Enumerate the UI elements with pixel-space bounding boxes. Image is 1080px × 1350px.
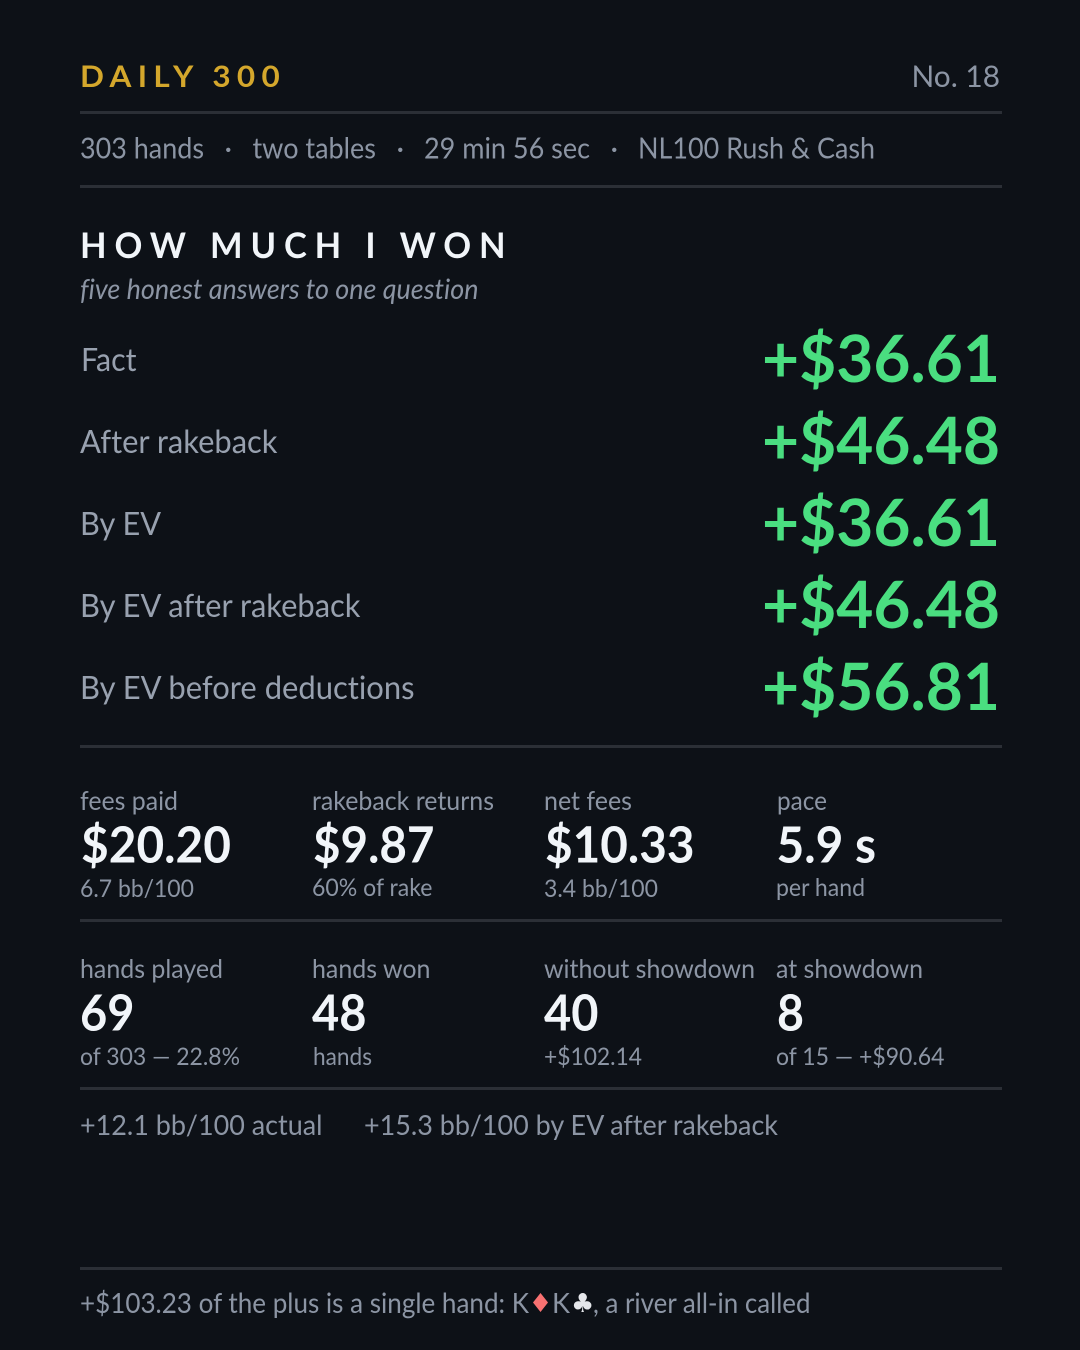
stat: hands won: 48 (312, 982, 366, 1042)
header: issue number: No. 18 (912, 58, 1000, 94)
stat: fees paid: 6.7 bb/100 (80, 874, 194, 903)
session summary: two tables (252, 130, 376, 166)
stat: at showdown (776, 952, 945, 1071)
row: by EV: By EV (80, 503, 161, 542)
stat: fees paid (80, 784, 231, 903)
stat: hands played (80, 952, 240, 1071)
stat: pace: 5.9 s (776, 814, 876, 874)
row: by EV after rakeback: +$46.48 (762, 564, 1000, 642)
row: by EV (80, 482, 1000, 560)
stat: hands won (312, 952, 430, 1071)
win rate line (80, 1107, 779, 1141)
icon: diamond (533, 1293, 548, 1312)
stat: at showdown: at showdown (776, 952, 923, 984)
stat: net fees: net fees (544, 784, 632, 816)
footer note: K (552, 1285, 570, 1319)
stat: hands won: hands won (312, 952, 430, 984)
row: after rakeback: After rakeback (80, 421, 278, 460)
win rate line: +12.1 bb/100 actual (80, 1107, 322, 1141)
stat: pace: pace (777, 784, 827, 816)
row: by EV before deductions (80, 646, 1000, 724)
stat: hands played: of 303 — 22.8% (80, 1042, 240, 1071)
session summary: 29 min 56 sec (424, 130, 590, 166)
row: by EV after rakeback: By EV after rakeback (80, 585, 361, 624)
stat: at showdown: of 15 — +$90.64 (776, 1042, 945, 1071)
session summary (80, 130, 875, 166)
stat: rakeback returns (312, 784, 494, 902)
stat: hands played: hands played (80, 952, 223, 984)
stat: without showdown (544, 952, 755, 1071)
session summary: · (610, 130, 618, 166)
row: after rakeback (80, 400, 1000, 478)
session summary: NL100 Rush & Cash (638, 130, 875, 166)
stat: without showdown: without showdown (544, 952, 755, 984)
win rate line: +15.3 bb/100 by EV after rakeback (364, 1107, 779, 1141)
header: brand: DAILY 300 (80, 58, 286, 94)
session summary: · (396, 130, 404, 166)
row: by EV after rakeback (80, 564, 1000, 642)
footer note (80, 1285, 810, 1319)
session summary: · (224, 130, 232, 166)
row: after rakeback: +$46.48 (762, 400, 1000, 478)
stat: net fees (544, 784, 694, 903)
row: fact: Fact (81, 339, 137, 378)
stat: at showdown: 8 (777, 982, 804, 1042)
stat: net fees: 3.4 bb/100 (544, 874, 658, 903)
subtitle: five honest answers to one question (80, 271, 478, 305)
row: by EV before deductions: By EV before deductions (80, 667, 414, 706)
stat: fees paid: fees paid (80, 784, 178, 816)
row: fact (81, 318, 1000, 396)
results table (80, 318, 1000, 724)
session summary: 303 hands (80, 130, 204, 166)
stat: pace (776, 784, 876, 902)
stat: rakeback returns: $9.87 (313, 814, 434, 874)
footer note: +$103.23 of the plus is a single hand: K (80, 1285, 529, 1319)
row: fact: +$36.61 (762, 318, 1000, 396)
stat: hands won: hands (313, 1042, 372, 1071)
stat: pace: per hand (776, 873, 865, 902)
stat: without showdown: +$102.14 (544, 1042, 642, 1071)
stat: fees paid: $20.20 (81, 814, 231, 874)
row: by EV: +$36.61 (762, 482, 1000, 560)
stat: hands played: 69 (80, 982, 134, 1042)
stat: rakeback returns: rakeback returns (312, 784, 494, 816)
icon: club: ♣ (571, 1289, 594, 1319)
footer note: , a river all-in called (593, 1285, 810, 1319)
stat: net fees: $10.33 (545, 814, 694, 874)
stat: rakeback returns: 60% of rake (312, 873, 432, 902)
heading: HOW MUCH I WON (80, 224, 514, 266)
row: by EV before deductions: +$56.81 (762, 646, 1000, 724)
stat: without showdown: 40 (544, 982, 598, 1042)
